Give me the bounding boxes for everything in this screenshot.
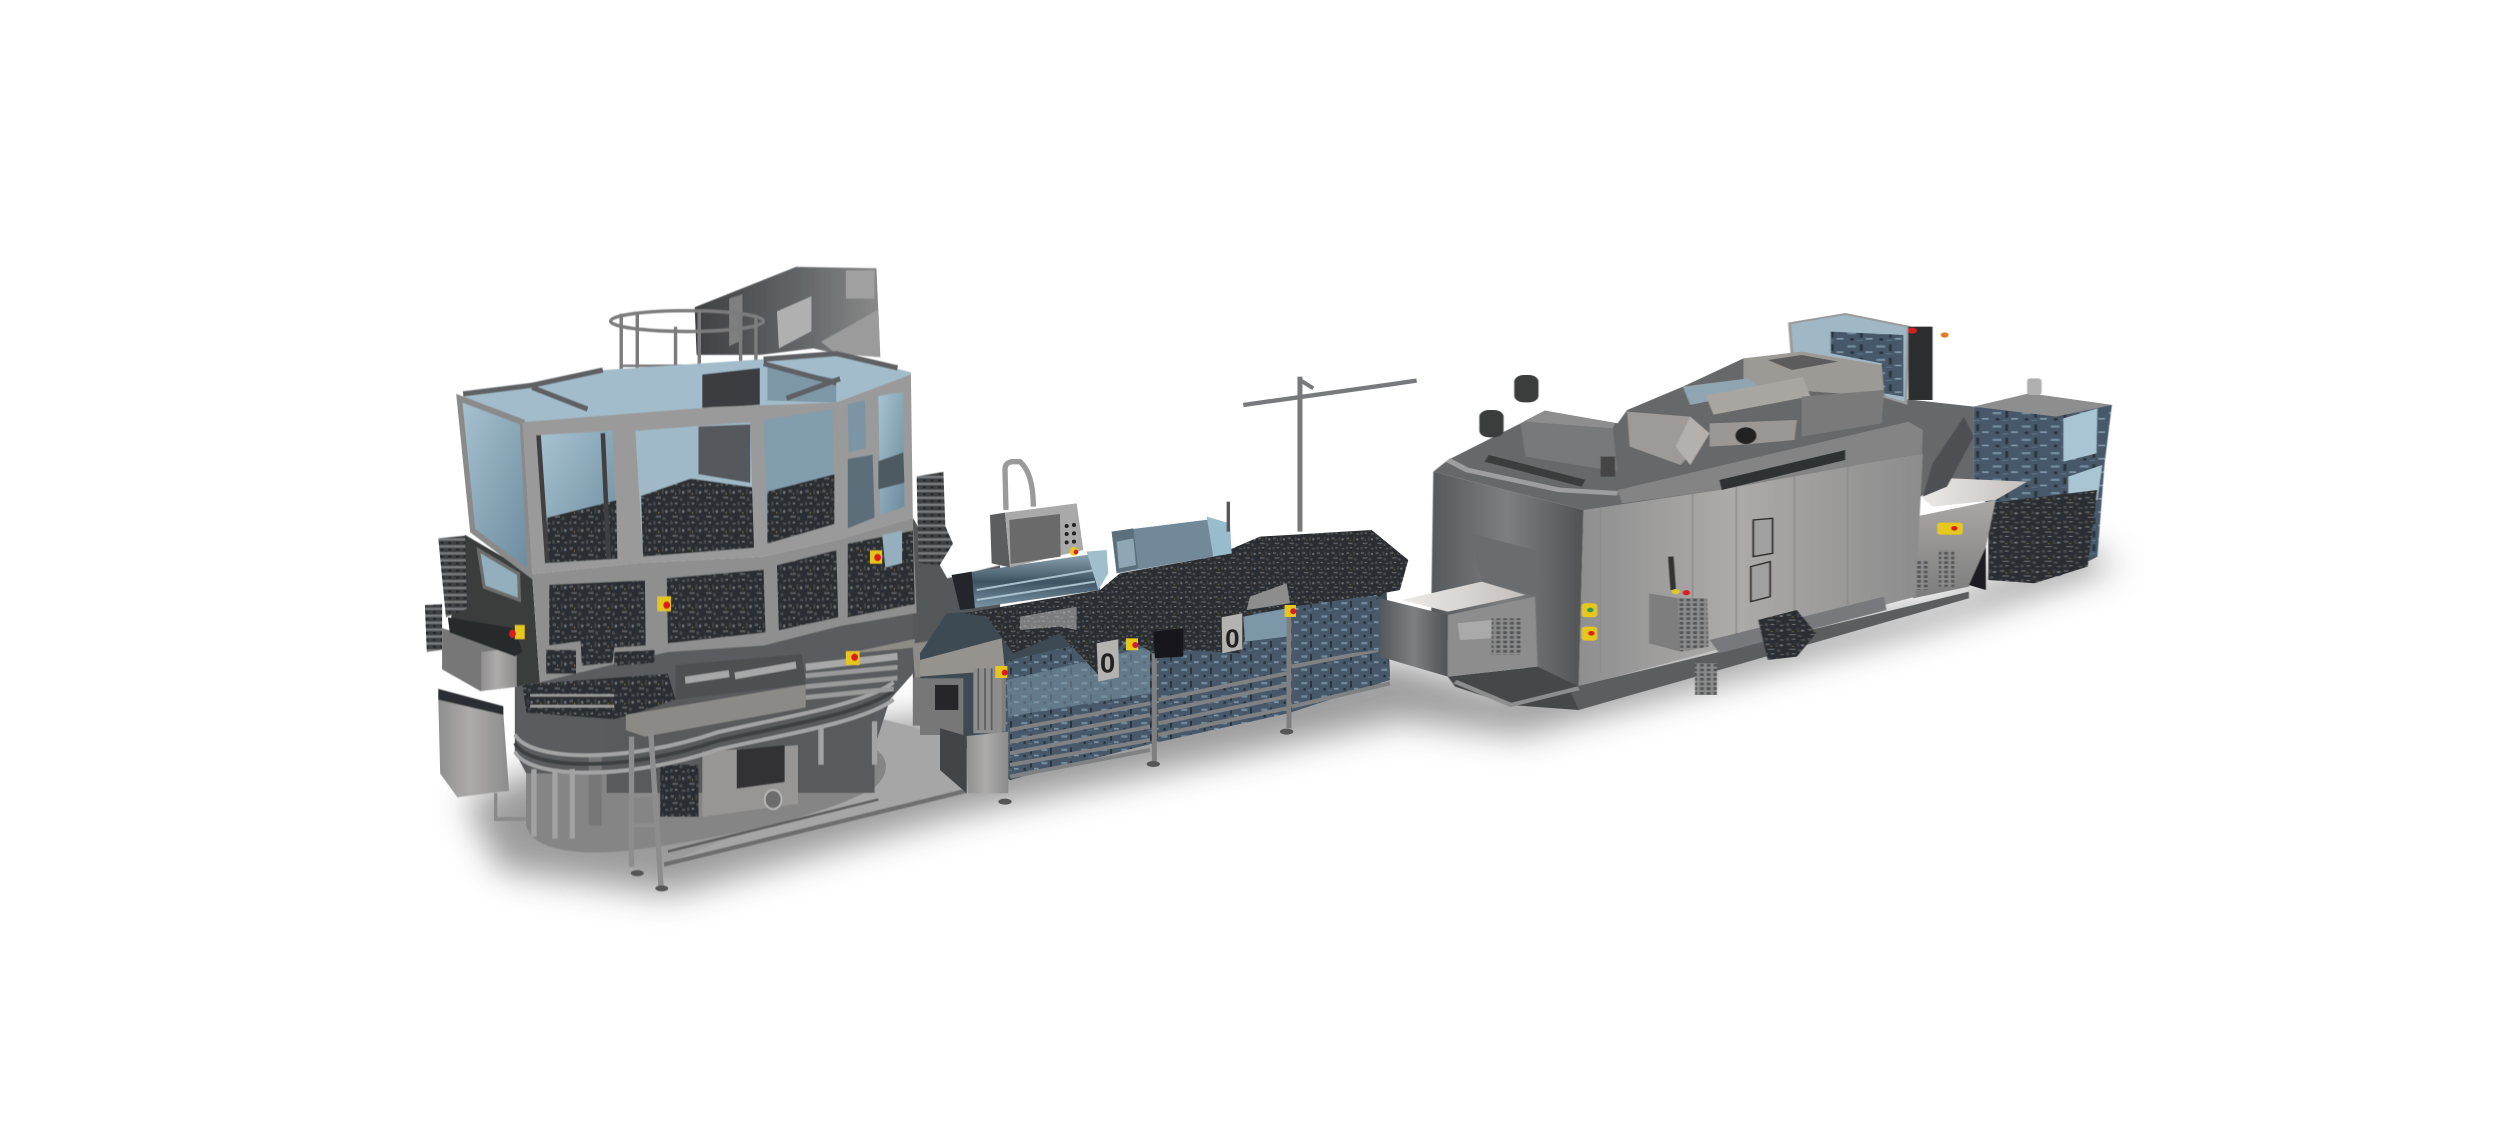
floor shadow [465, 545, 2120, 895]
panel: right module glass [1974, 378, 2112, 577]
panel: upper glass doors [538, 392, 904, 563]
panel: oven left face [1431, 472, 1584, 687]
panel: inlet underside [1448, 667, 1579, 710]
panel: left bracket box [442, 617, 522, 691]
panel: oven vent box [1649, 557, 1709, 652]
panel: floor plate [668, 717, 966, 862]
icon: hood and cylinder [1683, 352, 1884, 447]
panel: left cabinet [920, 678, 963, 735]
panel: transfer deck [920, 638, 1005, 677]
panel: lower dark doors [546, 531, 915, 674]
panel: upper frame [522, 374, 913, 574]
icon: top rails [463, 354, 898, 409]
icon: number tag left [1097, 639, 1119, 682]
icon: hatch lower [1751, 562, 1770, 602]
icon: side buttons [1582, 523, 1963, 641]
icon: curved conveyor [515, 682, 894, 773]
carousel unit [425, 267, 1000, 891]
icon: drum housing [1627, 412, 1710, 465]
panel: top box [1521, 411, 1618, 472]
icon: control panel [990, 462, 1083, 567]
icon: pipe manifold [1448, 457, 1618, 493]
panel: conveyor deck [626, 604, 1000, 737]
icon: number tag right: 0 [1225, 623, 1240, 653]
panel: left side glass [459, 398, 530, 574]
icon: fin stacks [425, 472, 953, 652]
panel: right cabinet [913, 669, 1000, 734]
panel: base frame [1455, 592, 1969, 710]
panel: left lower glass [478, 550, 519, 600]
icon: knob right [1514, 375, 1538, 402]
panel: right side silhouette [913, 518, 1000, 678]
panel: infeed silhouette [920, 590, 1390, 780]
icon: top ring frame [610, 309, 764, 407]
panel: right side skirt [1913, 417, 1996, 598]
panel: rear cabinet [1790, 314, 1949, 403]
panel: left side silhouette [450, 535, 540, 687]
icon: emergency stop buttons [995, 605, 1296, 678]
icon: number tag left: 0 [1100, 648, 1115, 679]
oven unit [1380, 314, 2112, 710]
panel: upper tubes [522, 674, 676, 719]
icon: knob left [1479, 410, 1504, 437]
infeed and frame unit [920, 377, 1417, 805]
panel: rear glass [463, 354, 911, 435]
panel: top beam [1618, 422, 1923, 503]
icon: hatch upper [1753, 518, 1773, 557]
panel: oven front face [1579, 453, 1923, 687]
panel: lower frame [532, 518, 917, 682]
icon: emergency stop buttons [509, 551, 882, 665]
panel: mechanism tangle [963, 530, 1408, 677]
panel: frame with rods [983, 590, 1390, 780]
icon: blue hood [952, 550, 1108, 610]
panel: inlet box [1380, 533, 1538, 677]
icon: frame posts [998, 610, 1293, 805]
panel: oven top silhouette [1433, 358, 1974, 517]
icon: stand legs [631, 730, 966, 891]
panel: right belt [1920, 478, 2027, 507]
icon: rear hopper [695, 267, 880, 357]
icon: T pole [1243, 377, 1417, 532]
panel: base pad [526, 747, 886, 852]
panel: seams [1601, 467, 1848, 673]
panel: base centre machinery [607, 700, 875, 817]
panel: lower cabinet [438, 689, 530, 819]
panel: lower silhouette [515, 609, 917, 825]
icon: number tag right [1222, 613, 1242, 653]
icon: blue box [1112, 502, 1232, 573]
panel: lower right mechanics [1988, 490, 2097, 583]
panel: right corner glass [882, 531, 902, 567]
panel: pedestal [940, 668, 1008, 793]
icon: base columns [534, 721, 875, 839]
